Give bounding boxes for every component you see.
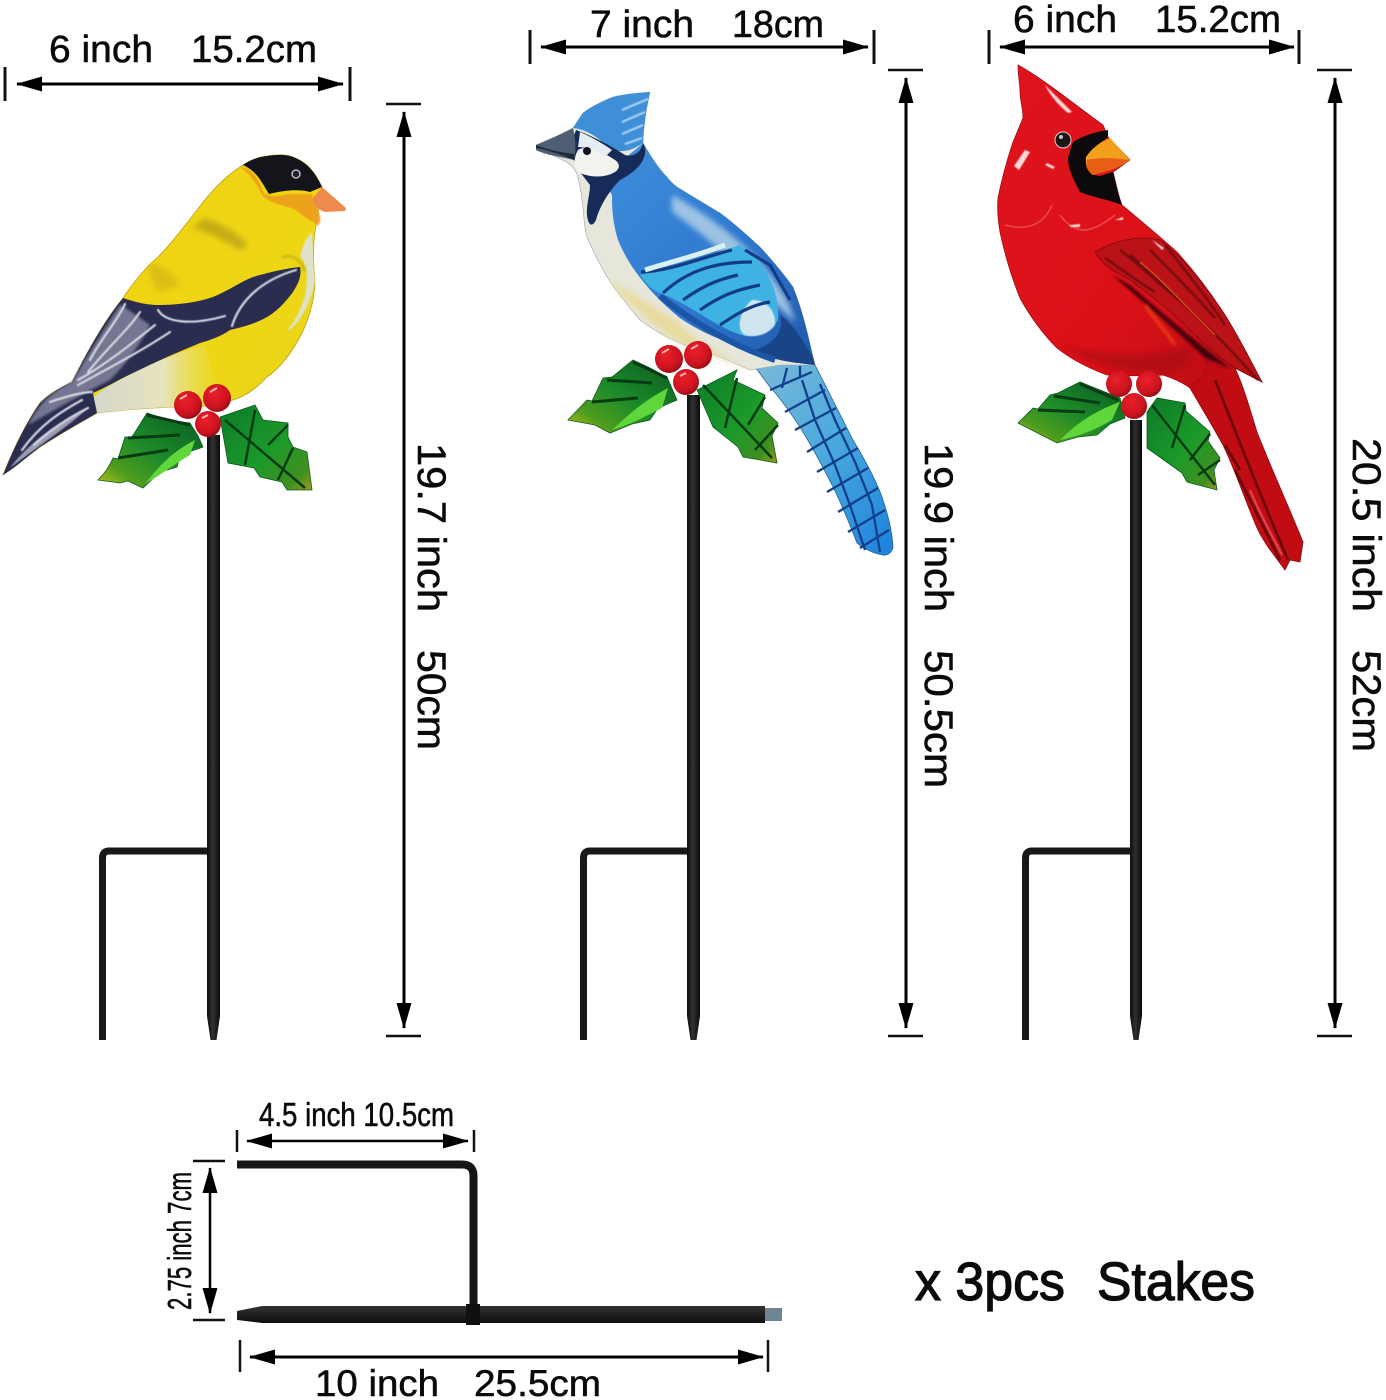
bird: blue jay: [536, 92, 893, 555]
wing bars: [640, 245, 778, 336]
beak: [313, 187, 346, 212]
body: [3, 155, 322, 475]
breast highlight: [286, 232, 315, 332]
wing grey sheen: [28, 305, 150, 425]
stake detail drawing: [237, 1164, 782, 1325]
nape orange: [240, 167, 320, 226]
dimension: goldfinch width: [5, 29, 350, 101]
berries: [655, 345, 683, 373]
light mantle: [672, 195, 795, 322]
dimension: cardinal height: [1317, 70, 1386, 1036]
orange sheen: [1145, 305, 1175, 345]
back shading: [192, 218, 248, 250]
stakes quantity label: [915, 1252, 1255, 1312]
dimension: cardinal width: 15.2cm: [1155, 0, 1281, 41]
dimension: cardinal width: 6 inch: [1013, 0, 1117, 41]
dimension: stake length: [240, 1340, 768, 1400]
holly: goldfinch: [98, 384, 312, 490]
shoulder shadow: [282, 256, 305, 272]
mask: [1068, 130, 1122, 205]
dimension: prong height: [161, 1161, 225, 1320]
dimension: blue jay width: 7 inch: [590, 4, 694, 46]
dimension: blue jay height: 19.9 inch: [916, 443, 960, 612]
highlights: [1014, 85, 1164, 250]
holly: cardinal: [1018, 371, 1220, 490]
bird: cardinal: [998, 65, 1303, 570]
dimension: blue jay width: 18cm: [732, 4, 824, 46]
dimension: prong width: 4.5 inch 10.5cm: [259, 1096, 454, 1133]
back and wing base: [600, 143, 815, 365]
wing feather highlights: [22, 270, 296, 450]
berries: [174, 391, 202, 419]
wing: [3, 267, 301, 475]
belly: [93, 345, 222, 413]
berries: [1106, 371, 1132, 397]
wing: [1095, 238, 1262, 382]
stakes quantity label: Stakes: [1097, 1252, 1255, 1312]
tail: [1190, 330, 1303, 570]
stake: cardinal: [1026, 420, 1142, 1040]
dimension: goldfinch height: [386, 104, 453, 1036]
left leaf: [568, 360, 677, 433]
holly: blue jay: [568, 341, 778, 463]
stakes quantity label: x 3pcs: [915, 1252, 1065, 1312]
cap: [243, 155, 322, 194]
beak: [536, 128, 575, 160]
stake: blue jay: [584, 395, 700, 1040]
dimension: goldfinch height: 19.7 inch: [409, 443, 453, 612]
stake: goldfinch: [102, 435, 220, 1040]
dimension: prong height: 2.75 inch 7cm: [161, 1172, 198, 1310]
dimension: goldfinch width: 15.2cm: [191, 29, 317, 71]
left leaf: [98, 413, 203, 488]
face: [573, 130, 645, 225]
dimension: blue jay height: [888, 70, 960, 1036]
wing shadow: [1112, 275, 1230, 368]
right leaf: [697, 370, 778, 463]
dimension: goldfinch width: 6 inch: [49, 29, 153, 71]
lower body shading: [1060, 345, 1191, 373]
dimension: blue jay width: [530, 4, 874, 64]
dimension: prong width: [237, 1096, 474, 1152]
tail: [750, 360, 893, 555]
dark tail coverts: [755, 315, 815, 365]
beak: [1086, 138, 1130, 175]
dimension: cardinal width: [989, 0, 1299, 64]
right leaf: [1147, 398, 1220, 490]
body: [536, 92, 815, 370]
dimension: goldfinch height: 50cm: [409, 650, 453, 750]
shoulder feathers: [1005, 205, 1115, 230]
crest: [573, 92, 650, 151]
dimension: blue jay height: 50.5cm: [916, 650, 960, 788]
bird: goldfinch: [3, 155, 346, 475]
body: [998, 65, 1262, 388]
eye: [292, 170, 300, 178]
eye: [1055, 132, 1071, 148]
tail grid: [770, 366, 889, 552]
left leaf: [1018, 382, 1125, 443]
wing lower edge: [660, 296, 775, 360]
belly tint: [608, 280, 748, 372]
right leaf: [220, 405, 312, 490]
